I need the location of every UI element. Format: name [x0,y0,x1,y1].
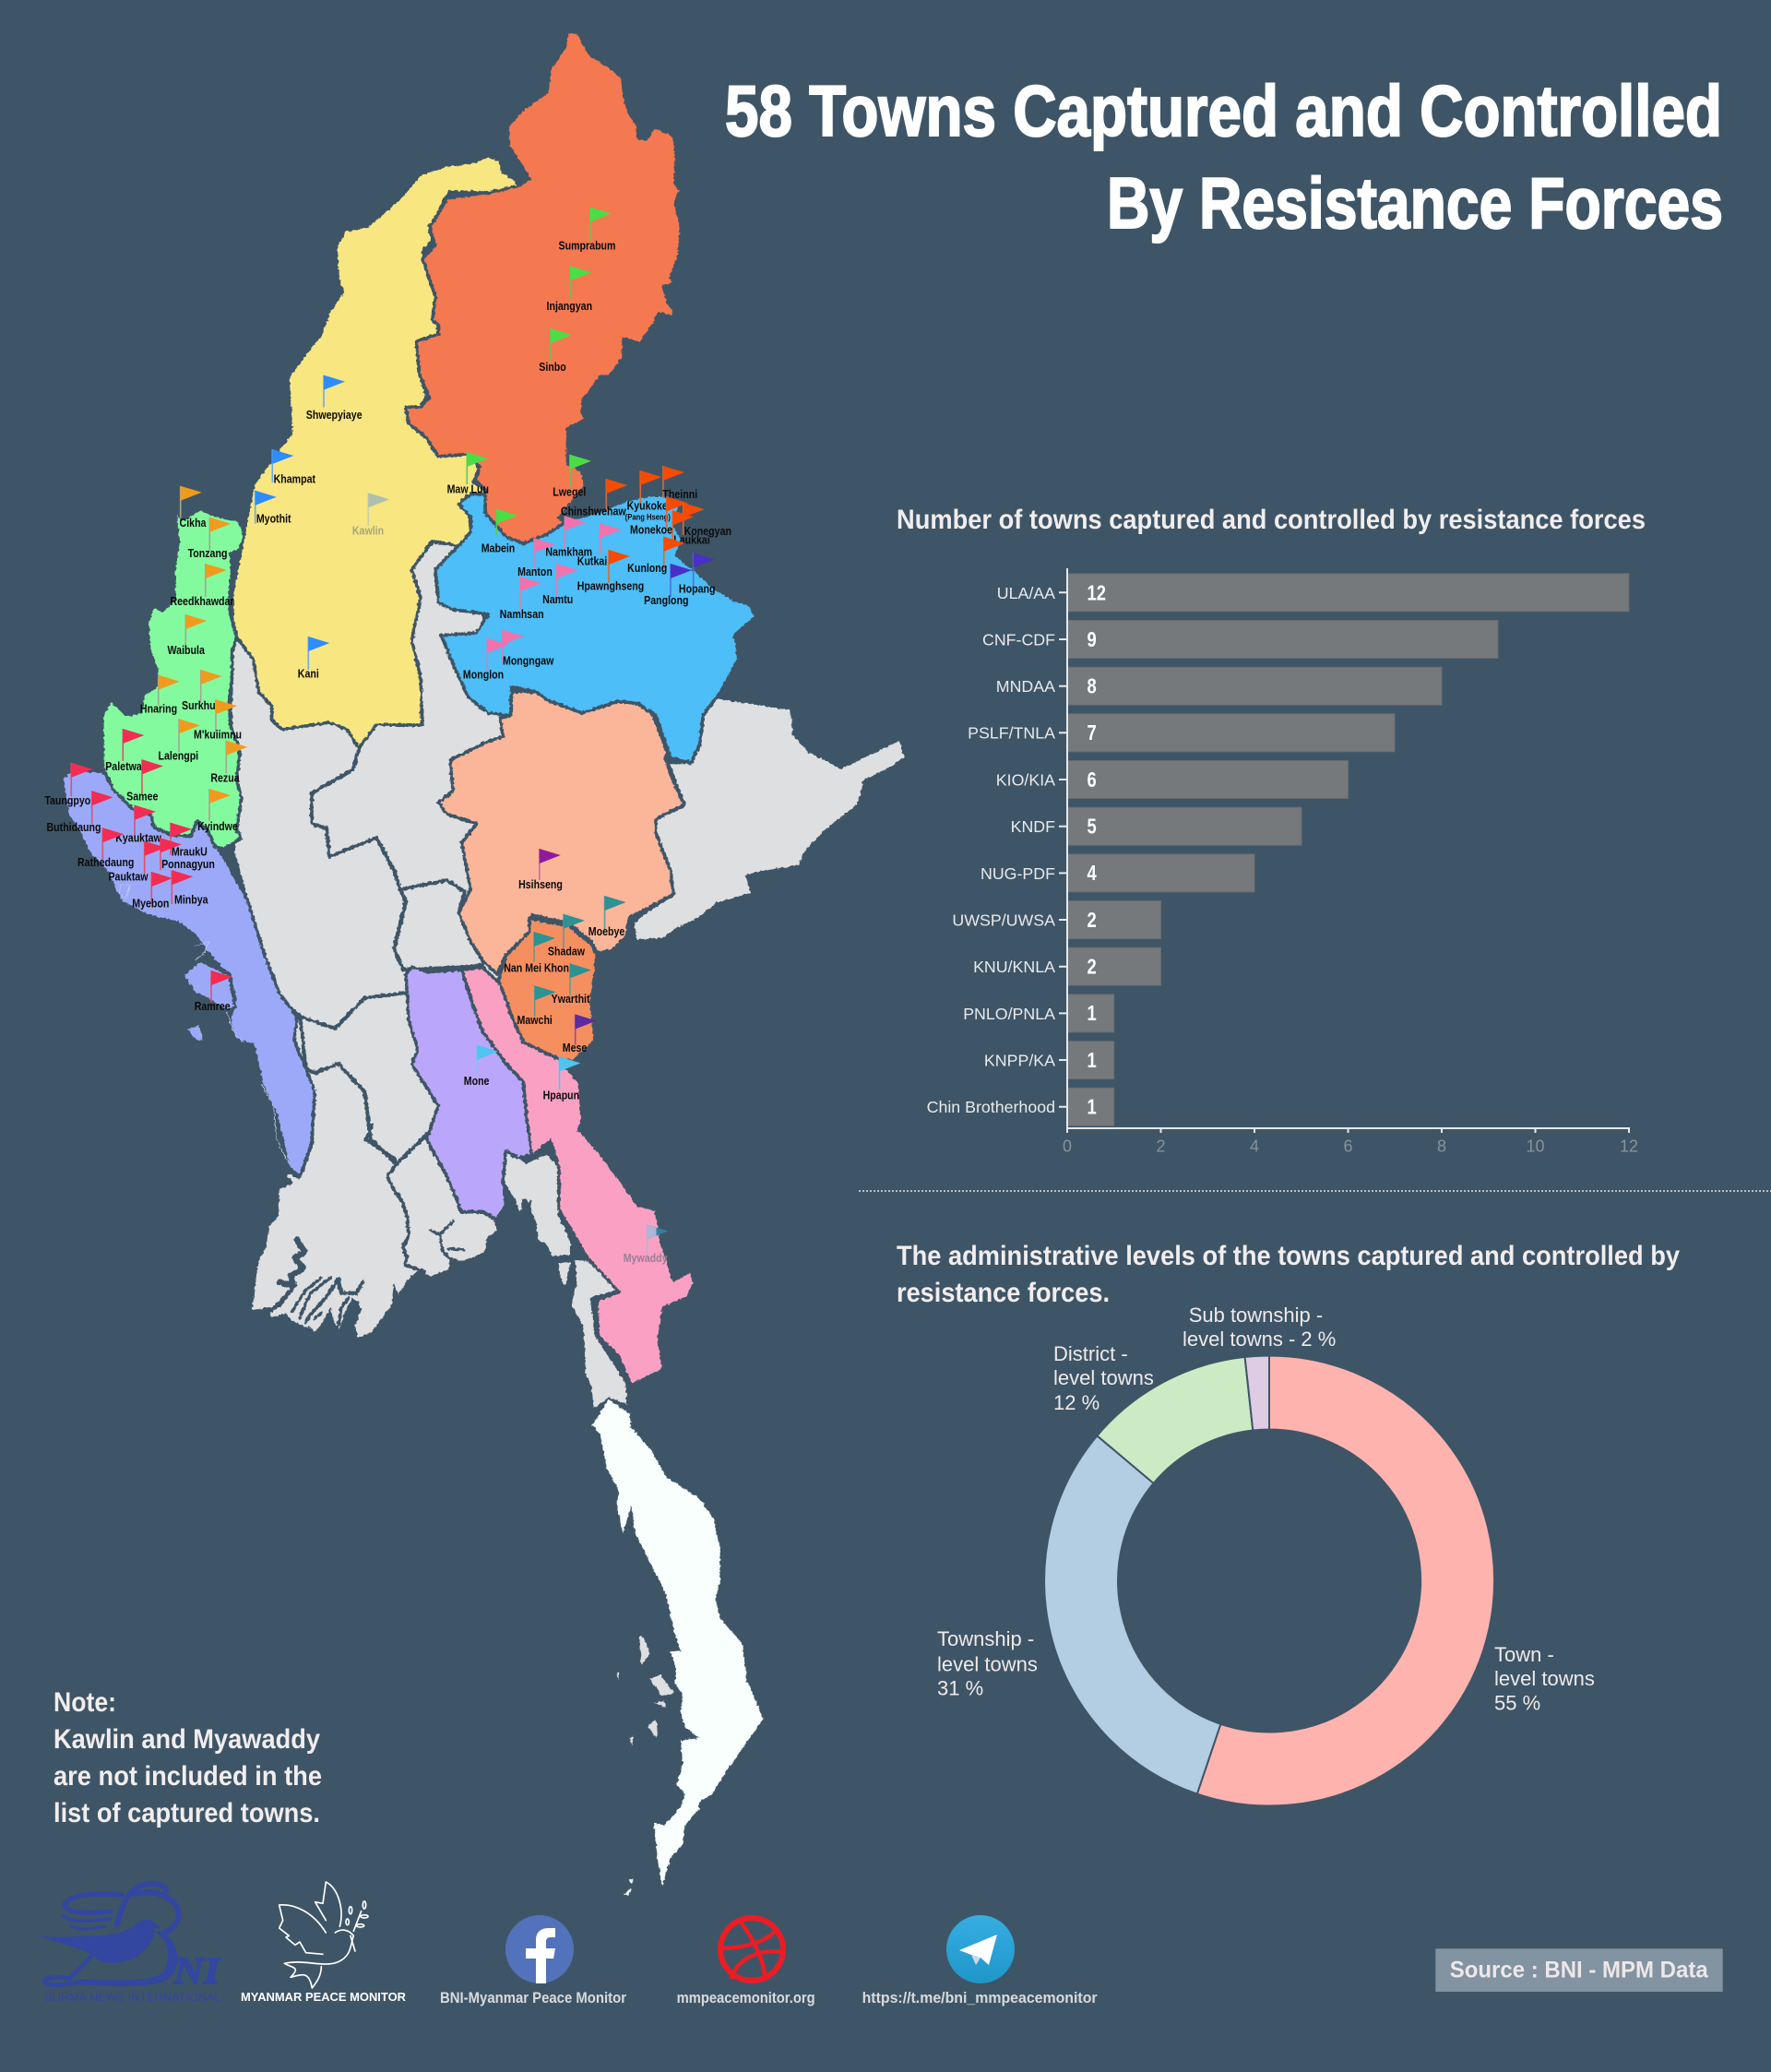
flag: Cikha [180,486,207,530]
category labels: NUG-PDF [981,864,1055,883]
flag: Hsihseng: Hsihseng [518,878,563,891]
flag: Namtu [542,564,578,606]
logo: Burma News International [36,1884,221,2004]
bar chart heading: Number of towns captured and controlled by resistance forces [897,505,1646,535]
logo: Burma News International: BURMA NEWS INTERNATIONAL [44,1991,220,2004]
region: Cheduba island [185,1024,206,1042]
category labels [927,584,1055,1116]
flag: Monekoe [630,496,688,537]
donut label: District: 12 % [1053,1391,1099,1414]
flag: Lalengpi: Lalengpi [158,750,198,763]
bar values: 5 [1087,816,1097,839]
note: Note: [53,1687,116,1718]
category labels: UWSP/UWSA [952,911,1055,930]
flag: Maw Luu: Maw Luu [447,483,489,496]
donut chart [1044,1355,1494,1805]
flag: Myothit [256,491,291,526]
bar values: 9 [1087,628,1097,652]
flag: Konegyan: Konegyan [684,525,731,538]
region: Ramree island [183,960,235,1012]
bar values: 7 [1087,721,1097,745]
southern map pieces [592,1399,763,1896]
flag: Kyauktaw [115,805,162,845]
flag: Injangyan: Injangyan [547,300,592,313]
donut label: Town: 55 % [1494,1692,1540,1715]
source box: Source : BNI - MPM Data [1450,1957,1709,1983]
flag: Namhsan: Namhsan [500,608,544,621]
flag: Ramree [195,971,232,1013]
category labels: KNPP/KA [984,1052,1055,1070]
bar values: 8 [1087,675,1097,698]
flag: Sinbo: Sinbo [539,361,566,374]
flag: Mywaddy: Mywaddy [624,1252,668,1265]
flag: Chinshwehaw [561,479,627,518]
bar values: 6 [1087,768,1097,792]
flag: Moebye: Moebye [588,925,625,938]
flag: Rathedaung: Rathedaung [77,856,134,869]
region: Kayin and Mon (pink) [462,967,695,1386]
segment: District-level 12% [1097,1357,1253,1483]
flag: Tonzang [188,518,231,560]
icon: Telegram [862,1915,1098,2007]
region: Chin (green) [102,500,244,849]
donut label: Town [1494,1643,1595,1715]
donut label: District [1053,1342,1154,1414]
bar values: 2 [1087,909,1097,933]
flag: Minbya [172,870,208,907]
flag: Mone: Mone [464,1075,490,1088]
region: central grey lowlands [232,542,529,1139]
flag: Sinbo [539,328,572,374]
bar chart [927,568,1638,1156]
flag: Pauktaw [108,841,166,884]
flag: Injangyan [547,266,592,313]
flag: Cikha: Cikha [180,517,207,530]
flag: Mese: Mese [563,1042,588,1054]
flag: Monglon [463,638,508,682]
flag: Tonzang: Tonzang [188,547,227,560]
flag: Nan Mei Khon: Nan Mei Khon [504,962,569,975]
icon: Telegram: https://t.me/bni_mmpeacemonitor [862,1989,1098,2007]
region: Shan south (peach) [438,692,684,974]
x axis tick labels [1063,1137,1638,1156]
flag: Paletwa: Paletwa [105,760,142,773]
icon: website globe: mmpeacemonitor.org [677,1989,815,2007]
flag: Rezua [210,741,247,785]
category labels: ULA/AA [997,584,1055,602]
flag: Panglong: Panglong [644,594,688,607]
flag: Kunlong [627,537,685,575]
flag: Ywarthit: Ywarthit [552,993,590,1006]
river channels [270,1125,530,1326]
flag: Pauktaw: Pauktaw [108,871,149,884]
flag: Kawlin: Kawlin [352,525,384,538]
flag: Hpapun: Hpapun [543,1090,579,1102]
flag: Surkhu [182,670,222,712]
donut label: Township: level towns [937,1653,1038,1676]
x axis tick labels: 10 [1526,1137,1545,1156]
flag: Paletwa [105,729,144,773]
bar values: 2 [1087,956,1097,979]
flag: Mywaddy [624,1225,668,1265]
flag: Namtu: Namtu [542,593,573,606]
flag: Mone [464,1045,498,1088]
flag: Hpapun [543,1056,581,1102]
flag: Hnaring: Hnaring [140,703,177,716]
icon: Facebook: BNI-Myanmar Peace Monitor [440,1989,626,2007]
map flags and town labels [44,207,731,1265]
flag: Minbya: Minbya [174,894,208,907]
category labels: KIO/KIA [996,771,1055,790]
x axis tick labels: 8 [1437,1137,1446,1156]
bar values: 1 [1087,1096,1097,1119]
region: Rakhine (periwinkle) [62,769,315,1176]
flag: Hpawnghseng: Hpawnghseng [577,580,644,593]
title [725,70,1723,244]
flag: Kyukoke: Kyukoke [627,500,668,513]
region: Sagaing (yellow) [232,156,517,748]
region: Shan north (blue) [435,494,756,763]
flag: Rezua: Rezua [210,772,240,785]
donut label: District: level towns [1053,1366,1154,1389]
x axis tick labels: 12 [1620,1137,1638,1156]
flag: Konegyan [683,503,731,538]
flag: Myebon: Myebon [132,898,169,911]
category labels: Chin Brotherhood [927,1098,1055,1116]
region: Kayah (orange) [497,918,597,1062]
note [53,1687,322,1828]
flag: Mongngaw: Mongngaw [503,655,554,668]
Mon coastal strip [503,1150,570,1256]
donut label: Sub township: level towns - 2 % [1183,1328,1336,1351]
bar values: 12 [1087,582,1106,605]
flag: Mabein: Mabein [481,542,515,555]
flag: Mongngaw [503,630,554,668]
bar values: 4 [1087,862,1097,886]
flag: Kutkai: Kutkai [577,555,607,568]
bars [1067,574,1629,1125]
donut label: Sub township [1183,1304,1336,1351]
region: eastern Shan grey [633,697,906,941]
flag: Panglong [644,564,692,607]
flag: Rathedaung [77,828,134,869]
source box [1435,1948,1723,1992]
flag: Myebon [132,872,172,911]
flag: M'kuiimnu: M'kuiimnu [194,729,242,742]
flag: Hpawnghseng [577,550,644,593]
map: Myanmar regions [62,32,906,1896]
logo: Myanmar Peace Monitor [241,1882,406,2004]
category labels: PSLF/TNLA [968,723,1055,742]
flag: Ponnagyun [160,838,215,871]
region: Tanintharyi (white) [592,1399,763,1887]
flag: Kyukoke [625,470,671,521]
flag: Samee [126,759,163,804]
flag: Sumprabum [559,207,615,253]
flag: Hopang [679,553,715,596]
flag: M'kuiimnu [194,699,242,742]
region: Kachin (red-orange) [406,32,682,543]
icon: Facebook [440,1915,626,2007]
category labels: PNLO/PNLA [963,1005,1055,1023]
bar values: 1 [1087,1049,1097,1073]
donut chart heading [897,1241,1680,1308]
flag: Mabein [481,509,517,555]
region: Bago (purple) [406,967,532,1219]
axes and ticks [1059,568,1630,1133]
flag: Lalengpi [158,719,200,763]
donut label: Township: Township - [937,1627,1034,1650]
flag: Namkham [545,516,592,559]
internal grey borders [279,748,482,1164]
icon: website globe [677,1918,815,2007]
flag: Kyindwe: Kyindwe [197,820,238,833]
small island [558,1262,570,1285]
donut label: Township [937,1627,1038,1700]
x axis tick labels: 0 [1063,1137,1072,1156]
category labels: CNF-CDF [982,631,1055,649]
flag: Taungpyo: Taungpyo [44,794,90,807]
flag: Ramree: Ramree [195,1000,231,1013]
coastal channels in Rakhine [119,885,289,1162]
note: Kawlin and Myawaddy [53,1724,320,1755]
flag: Laukkai: Laukkai [673,534,710,547]
flag: Monglon: Monglon [463,669,504,682]
flag: Shadaw [548,914,586,959]
flag: Theinni [662,466,697,501]
bar values [1087,582,1106,1119]
category labels: MNDAA [996,677,1055,696]
flag: Waibula [168,614,207,657]
flag: Chinshwehaw: Chinshwehaw [561,506,627,518]
donut label: Sub township: Sub township - [1189,1304,1323,1327]
segment: Sub township-level 2% [1245,1355,1269,1430]
logo: Myanmar Peace Monitor: MYANMAR PEACE MONITOR [241,1991,406,2004]
x axis tick labels: 2 [1156,1137,1166,1156]
donut label: Township: 31 % [937,1677,983,1700]
donut label: Town: Town - [1494,1643,1554,1666]
flag: Sumprabum: Sumprabum [559,240,615,253]
flag: Buthidaung [47,791,113,834]
flag: Ywarthit [552,963,591,1006]
flag: Shadaw: Shadaw [548,946,586,959]
donut label: Town: level towns [1494,1667,1595,1690]
flag: Kutkai [577,523,622,568]
flag: Kani [298,637,329,681]
flag: Mawchi: Mawchi [517,1014,553,1027]
flag: Kyindwe [197,789,238,833]
flag: Moebye [588,896,626,938]
flag: Hsihseng [518,849,563,891]
flag: Samee: Samee [126,791,159,804]
segment: Town-level 55% [1197,1356,1494,1805]
flag: Kyauktaw: Kyauktaw [115,832,162,845]
note: list of captured towns. [53,1798,320,1828]
flag: Lwegel [553,455,591,499]
flag: Theinni: Theinni [662,488,697,501]
flag: Mawchi [517,985,556,1027]
flag: Namhsan [500,577,544,621]
flag: Namkham: Namkham [545,546,592,559]
region: delta, Bago and Mon coast with channels [252,1125,570,1338]
flag: Mese [563,1015,597,1054]
bar values: 1 [1087,1002,1097,1026]
map regions, northern and central [62,32,906,1411]
flag: Khampat [272,449,315,486]
islands [616,1637,674,1896]
flag: Reedkhawdar [170,564,234,608]
flag: Laukkai [672,510,710,547]
flag: Nan Mei Khon [504,932,569,975]
flag: Taungpyo [44,763,92,807]
donut label: District: District - [1053,1342,1128,1365]
flag: Shwepyiaye: Shwepyiaye [306,409,363,422]
flag: Manton [517,538,555,578]
flag: Lwegel: Lwegel [553,486,586,499]
donut chart heading: resistance forces. [897,1278,1110,1308]
flag: Maw Luu [447,452,489,496]
flag: Monekoe: Monekoe [630,524,673,537]
donut chart heading: The administrative levels of the towns captured and controlled by [897,1241,1680,1271]
flag: MraukU: MraukU [172,846,208,859]
note: are not included in the [53,1761,322,1792]
flag: Myothit: Myothit [256,513,291,526]
segment: Township-level 31% [1044,1435,1220,1794]
flag: Surkhu: Surkhu [182,699,216,712]
flag: Hopang: Hopang [679,583,715,596]
category labels: KNDF [1011,817,1055,836]
flag: Kunlong: Kunlong [627,562,667,575]
flag: Khampat: Khampat [274,473,315,486]
logo: Burma News International: NI [172,1950,221,1993]
flag: Kani: Kani [298,668,319,681]
flag: Manton: Manton [517,566,553,578]
flag: Waibula: Waibula [168,644,205,657]
flag: Hnaring [140,675,180,716]
flag: Kawlin [352,493,389,538]
region: southern Mon strip grey [569,1258,628,1411]
flag: Kyukoke: (Pang Hseng) [625,512,671,521]
delta and Yangon land [252,1125,496,1338]
flag: Buthidaung: Buthidaung [47,821,101,834]
flag: Ponnagyun: Ponnagyun [161,858,215,871]
flag: MraukU [171,823,208,859]
flag: Shwepyiaye [306,375,363,422]
flag: Reedkhawdar: Reedkhawdar [170,595,234,608]
x axis tick labels: 4 [1250,1137,1259,1156]
x axis tick labels: 6 [1343,1137,1353,1156]
category labels: KNU/KNLA [973,958,1055,976]
